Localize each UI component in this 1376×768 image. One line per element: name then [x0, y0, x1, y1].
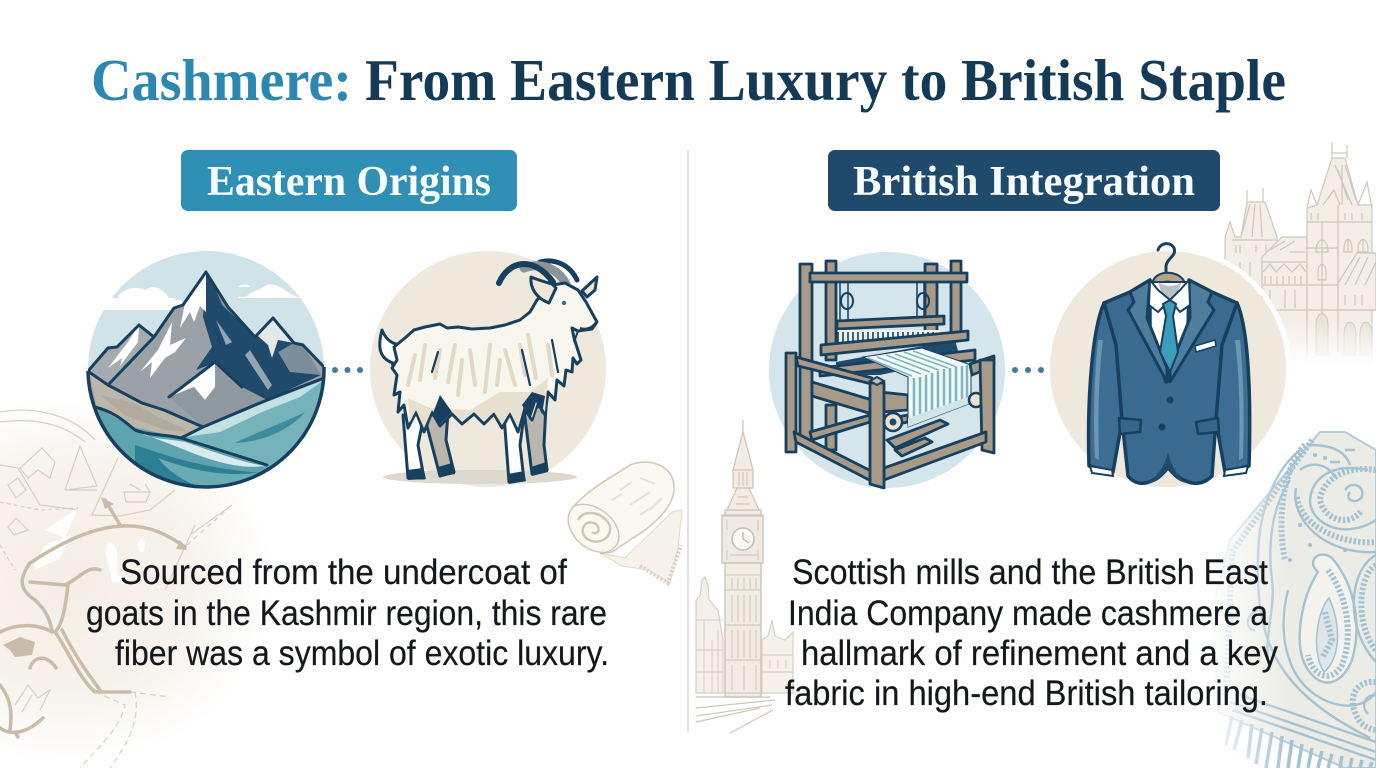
text block: British Integration description: Scottish mills and the British East	[792, 553, 1268, 592]
background: paisley shawl	[1212, 432, 1376, 768]
heading: British Integration	[828, 150, 1220, 211]
main paisley	[1300, 555, 1356, 682]
hanger	[1158, 244, 1175, 272]
text block: British Integration description: fabric in high-end British tailoring.	[785, 674, 1268, 713]
river	[97, 409, 266, 472]
icon: mountain and river	[86, 251, 326, 489]
beige bank	[89, 372, 203, 438]
lapels	[1128, 280, 1167, 382]
heading: British Integration: British Integration	[853, 159, 1195, 205]
divider	[687, 150, 689, 732]
connector dots: mountain to goat	[332, 367, 363, 373]
text block: British Integration description: India Company made cashmere a	[788, 594, 1268, 633]
text block: British Integration description	[785, 553, 1278, 713]
icon: tailored suit on hanger	[1047, 244, 1289, 490]
goat legs	[403, 405, 548, 484]
shirt	[1148, 282, 1190, 380]
goat head	[531, 277, 597, 303]
text block: Eastern Origins description: goats in the Kashmir region, this rare	[86, 594, 607, 633]
heading: Eastern Origins: Eastern Origins	[207, 159, 491, 205]
text block: British Integration description: hallmark of refinement and a key	[801, 634, 1278, 673]
icon: cashmere goat	[370, 251, 606, 487]
connector dots: loom to suit	[1012, 367, 1044, 373]
icon: wooden loom	[769, 252, 1005, 488]
flap pockets and buttons	[1119, 418, 1219, 434]
heading: Eastern Origins	[181, 150, 517, 211]
text block: Eastern Origins description	[86, 553, 609, 673]
text block: Eastern Origins description: Sourced from the undercoat of	[120, 553, 567, 592]
loom cloth	[863, 348, 971, 427]
mountain snow	[180, 273, 206, 328]
collar	[1149, 280, 1190, 312]
mountain shadow side	[196, 272, 321, 400]
jacket body	[1104, 280, 1237, 483]
shawl fringe	[1226, 716, 1372, 768]
goat tail	[380, 330, 418, 365]
background: Palace of Westminster sketch	[1225, 142, 1376, 362]
title: From Eastern Luxury to British Staple	[365, 47, 1286, 113]
pocket square	[1195, 340, 1216, 352]
background: Big Ben and Westminster sketch	[696, 420, 793, 733]
top paisley	[1320, 469, 1376, 520]
front slope	[170, 366, 265, 425]
sleeves	[1089, 303, 1130, 472]
text block: Eastern Origins description: fiber was a symbol of exotic luxury.	[115, 634, 609, 673]
panel: British Integration	[769, 150, 1289, 713]
background: rolled cashmere fabric	[568, 462, 682, 583]
goat body	[392, 283, 597, 432]
goat fur shading	[408, 378, 548, 428]
title: Cashmere:	[91, 47, 352, 113]
goat horns	[499, 261, 577, 284]
mountain lines	[89, 272, 324, 370]
background: faded trade route map	[0, 395, 275, 768]
tie	[1160, 300, 1178, 372]
side paisleys	[1361, 565, 1376, 650]
panel: Eastern Origins	[78, 150, 609, 673]
